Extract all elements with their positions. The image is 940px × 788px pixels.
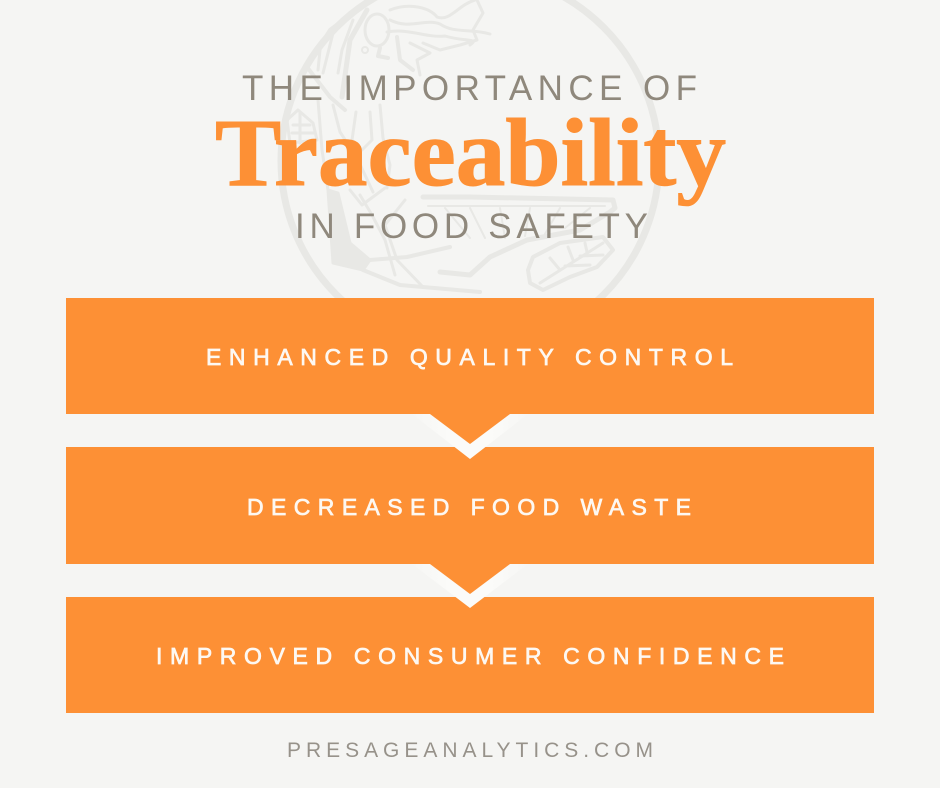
panel: decreased food waste [66, 447, 874, 564]
heading line: the importance of: THE IMPORTANCE OF [242, 69, 697, 108]
footer website: PRESAGEANALYTICS.COM [287, 739, 653, 762]
panel: enhanced quality control [66, 298, 874, 414]
arrow: second to third panel [412, 564, 528, 608]
heading line: in food safety: IN FOOD SAFETY [295, 207, 648, 246]
panel label: IMPROVED CONSUMER CONFIDENCE [156, 643, 784, 669]
heading keyword: traceability: Traceability [215, 99, 726, 206]
arrow: first to second panel [412, 414, 528, 459]
panel label: ENHANCED QUALITY CONTROL [206, 344, 733, 370]
watermark: coin emblem with figure holding bowl [281, 0, 659, 350]
title block [215, 69, 726, 246]
panel: improved consumer confidence [66, 597, 874, 713]
panel label: DECREASED FOOD WASTE [247, 494, 691, 520]
